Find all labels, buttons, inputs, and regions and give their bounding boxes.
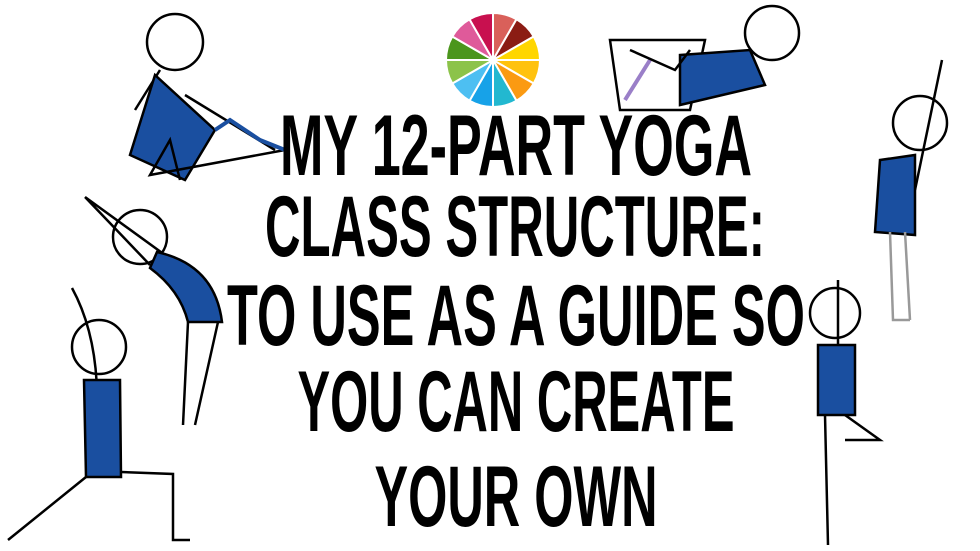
figure: backbend top-right	[610, 6, 799, 110]
figure: side bend left	[85, 197, 222, 425]
figure: standing right	[875, 60, 947, 320]
title: YOUR OWN	[374, 449, 658, 545]
title	[227, 98, 805, 545]
icon: color wheel	[446, 13, 540, 107]
figure: warrior bottom-left	[8, 288, 190, 540]
figure: seated forward bend top-left	[130, 14, 285, 180]
figure: tree pose bottom-right	[810, 280, 880, 545]
